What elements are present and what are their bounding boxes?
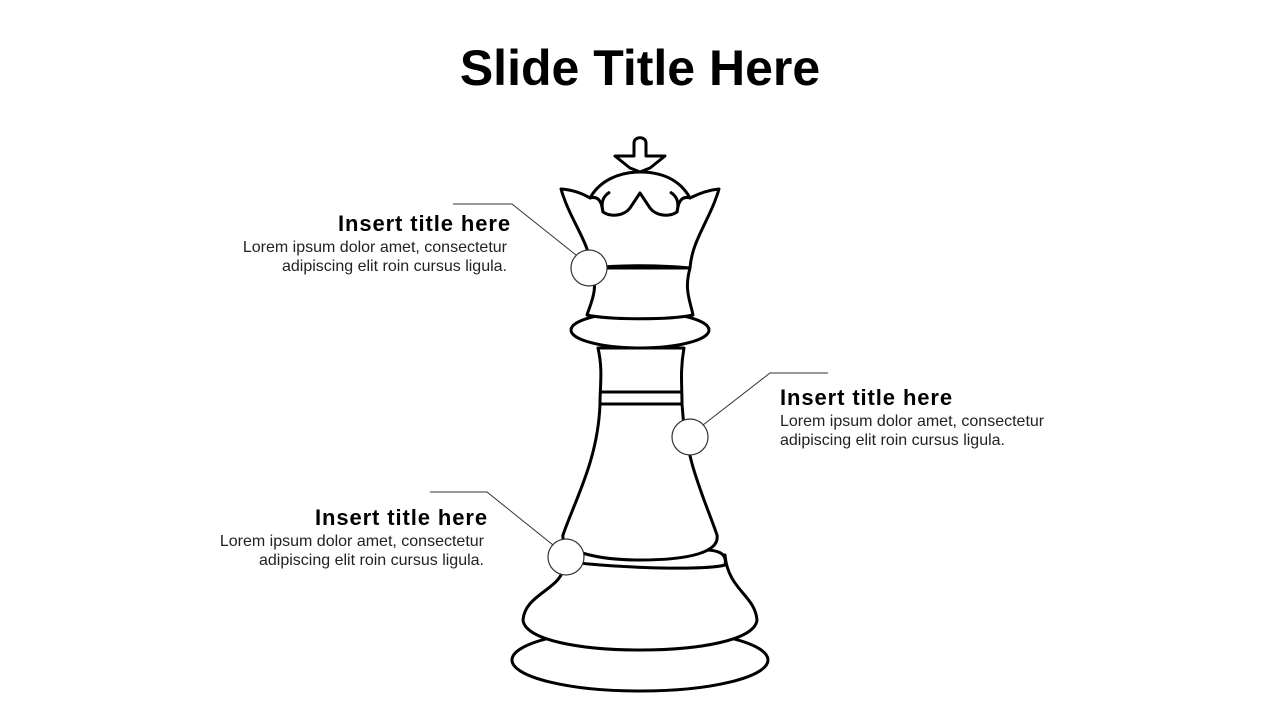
collar (571, 312, 709, 348)
callout 2 (780, 385, 1044, 449)
marker circles (548, 250, 708, 575)
callout 2: adipiscing elit roin cursus ligula. (780, 432, 1005, 449)
base plate (512, 629, 768, 691)
callout 2: Lorem ipsum dolor amet, consectetur (780, 413, 1044, 430)
callout 1: Lorem ipsum dolor amet, consectetur (243, 239, 507, 256)
callout 1: adipiscing elit roin cursus ligula. (282, 258, 507, 275)
cross (615, 138, 665, 172)
base bulb (523, 555, 757, 650)
callout 1: Insert title here (338, 211, 511, 236)
title: Slide Title Here (460, 40, 820, 96)
leader lines (430, 204, 828, 545)
shaft (563, 404, 717, 560)
callout 3: Lorem ipsum dolor amet, consectetur (220, 533, 484, 550)
callout 1 (243, 211, 511, 275)
ring (563, 550, 725, 568)
crown body (561, 172, 719, 268)
callout 3 (220, 505, 488, 569)
callout 2: Insert title here (780, 385, 953, 410)
callout 3: adipiscing elit roin cursus ligula. (259, 552, 484, 569)
neck (587, 268, 693, 319)
callout 3: Insert title here (315, 505, 488, 530)
